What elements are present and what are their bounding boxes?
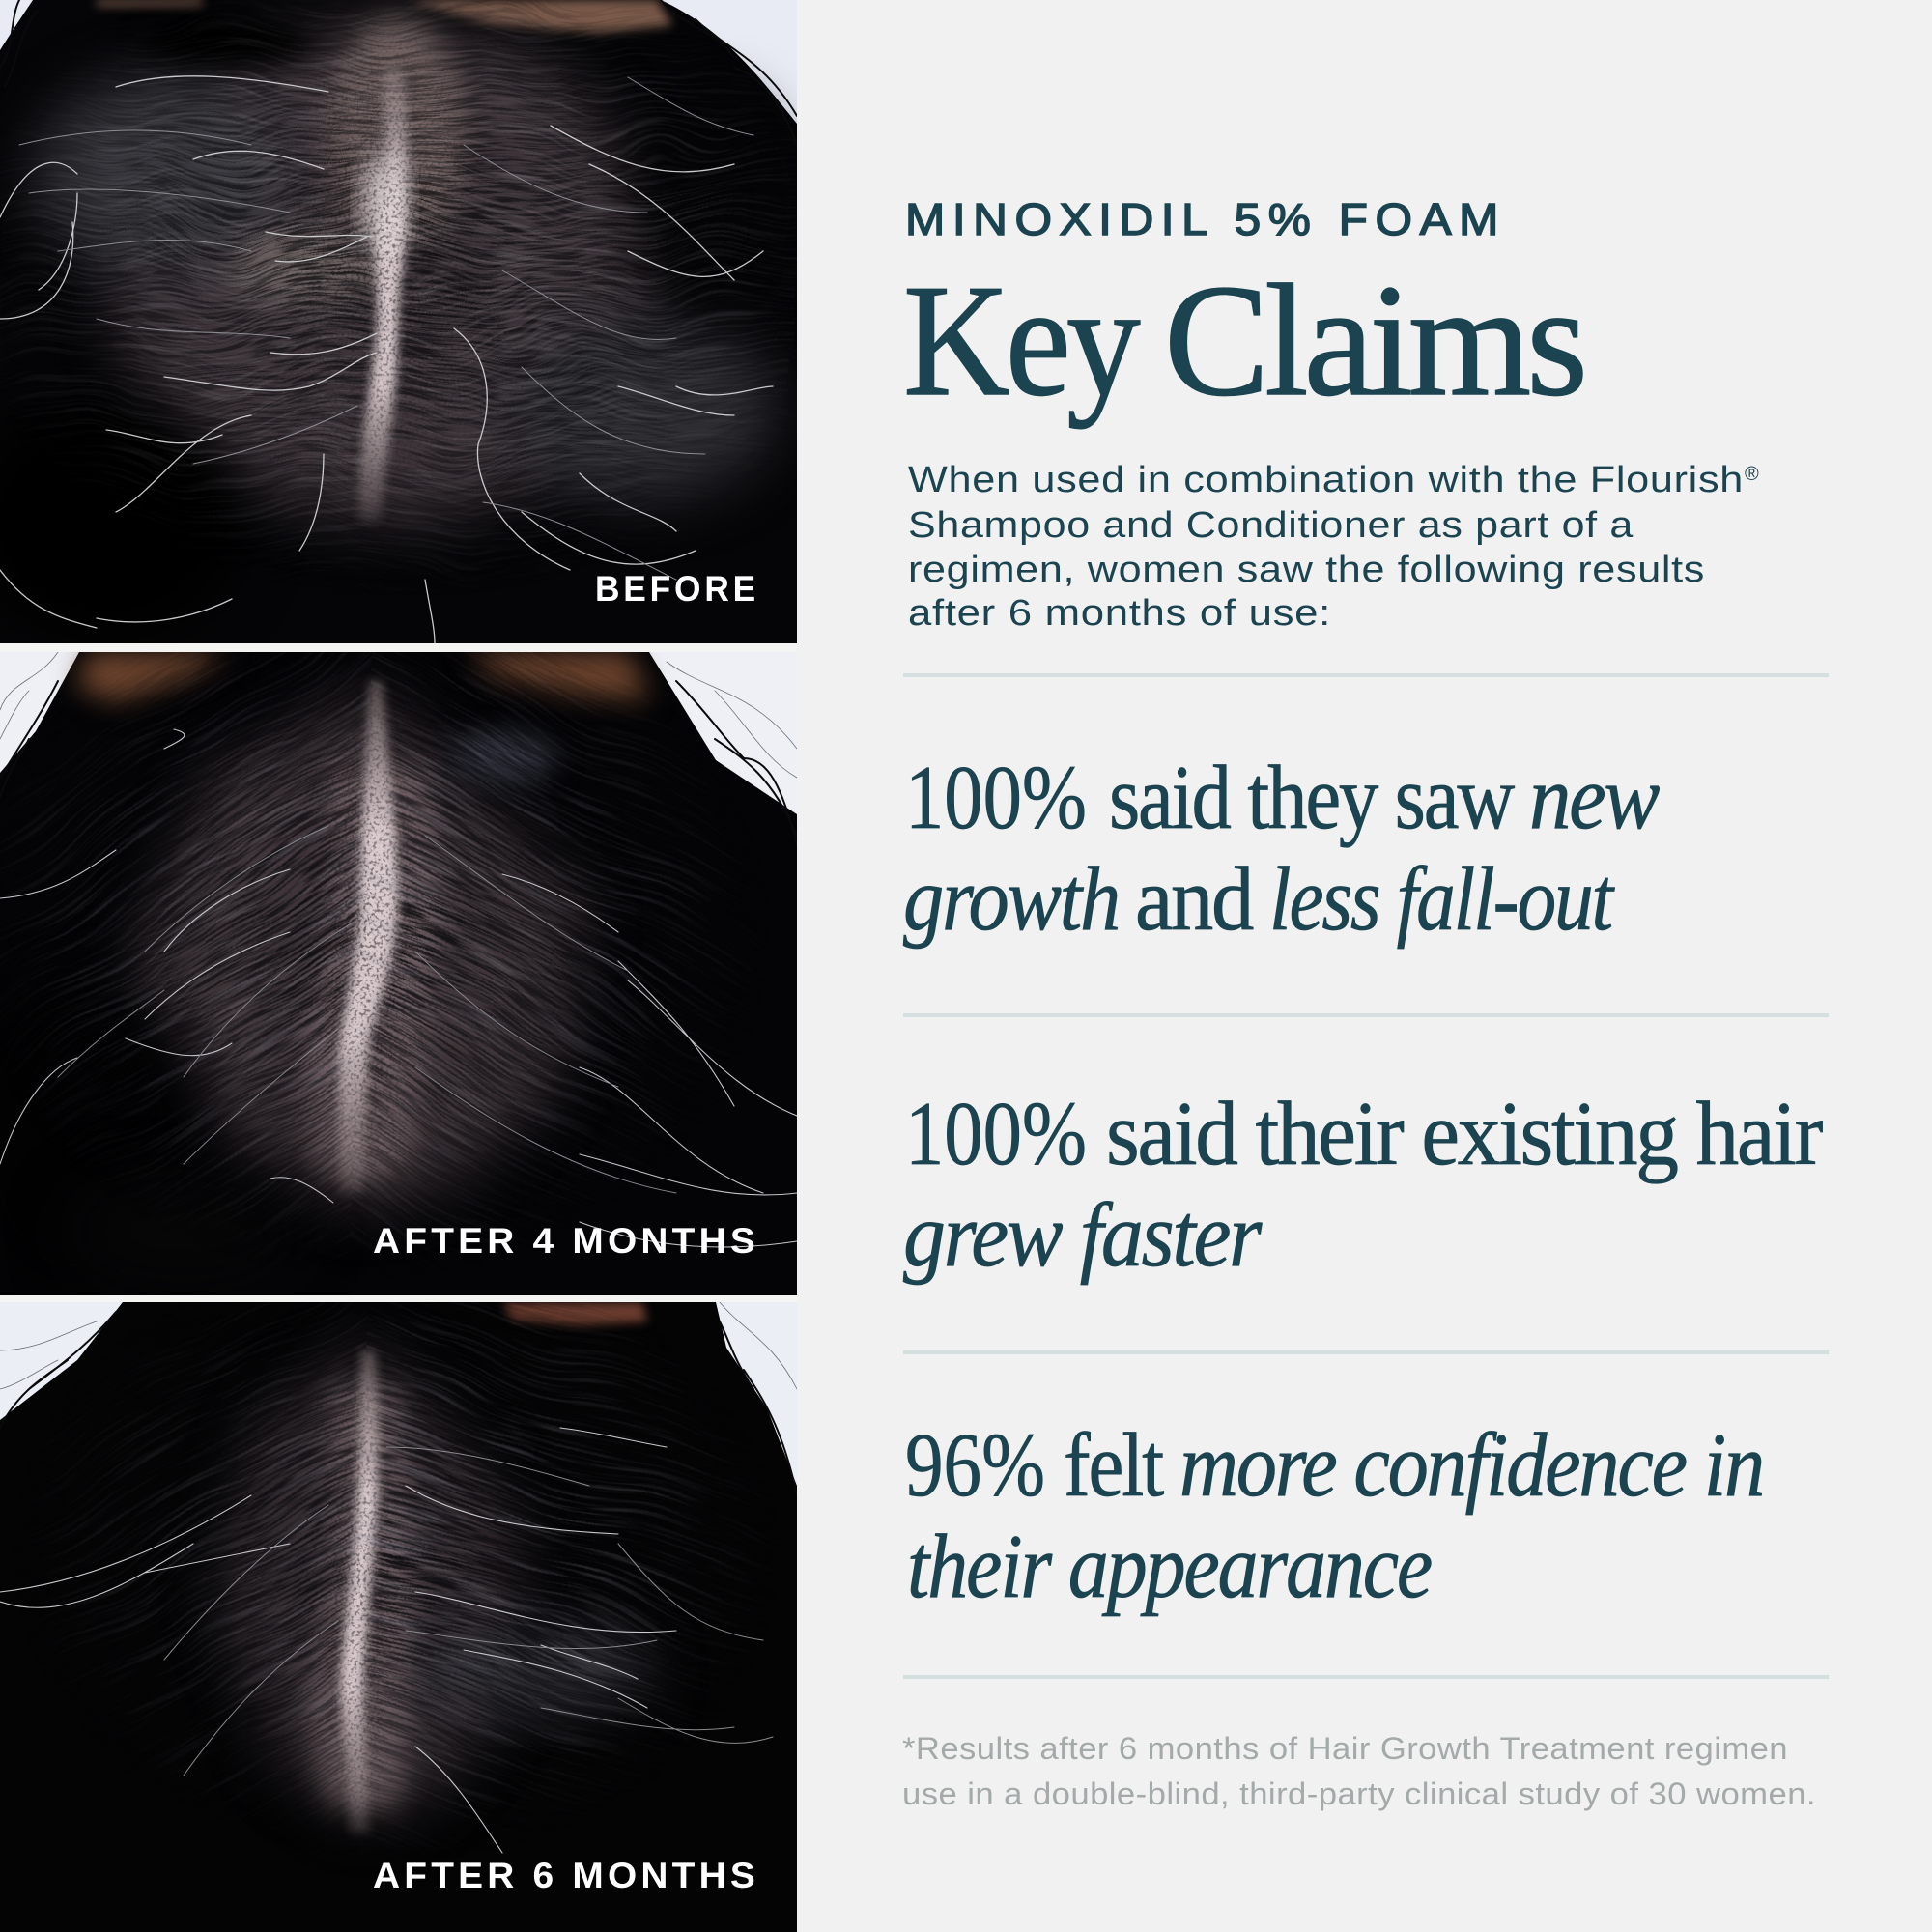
intro paragraph: ® [1745,464,1759,485]
title: key claims: Key [903,251,1141,429]
title: key claims [903,251,1583,429]
footnote: *Results after 6 months of Hair Growth Treatment regimen [902,1731,1788,1766]
claim: 100% new growth and less fall-out: new [1529,748,1661,848]
hair strands [0,652,797,1247]
claim: 100% existing hair grew faster: said their existing hair [1106,1084,1823,1184]
photo: after 6 months [0,1302,797,1932]
claim: 100% existing hair grew faster: grew faster [903,1185,1263,1286]
hair strands [0,0,797,643]
label: before: BEFORE [595,569,759,609]
claim: 100% new growth and less fall-out: said they saw [1109,748,1515,848]
claim: 100% new growth and less fall-out [903,748,1661,950]
claim: 100% new growth and less fall-out: less fall-out [1269,849,1615,950]
claim: 96% more confidence: their appearance [907,1517,1432,1617]
claim: 96% more confidence: felt [1064,1415,1164,1516]
hair strands [0,1302,797,1853]
intro paragraph: after 6 months of use: [908,593,1331,634]
label: after 6 months: AFTER 6 MONTHS [373,1856,759,1895]
claim: 100% new growth and less fall-out: growth [903,849,1119,950]
title: key claims: Claims [1164,251,1583,429]
intro paragraph [908,460,1759,634]
footnote [902,1731,1816,1811]
claim: 96% more confidence [905,1415,1763,1617]
gap strip between photos [0,0,797,1932]
divider lines [903,673,1829,1679]
intro paragraph: regimen, women saw the following results [908,550,1705,590]
photo: after 4 months [0,652,797,1295]
claim: 100% new growth and less fall-out: and [1135,849,1253,950]
claim: 96% more confidence: more confidence in [1179,1415,1763,1516]
claim: 100% existing hair grew faster: 100% [905,1084,1087,1184]
label: after 4 months: AFTER 4 MONTHS [373,1221,759,1261]
eyebrow: minoxidil 5% foam: MINOXIDIL 5% FOAM [905,194,1506,244]
intro paragraph: When used in combination with the Flourish [908,460,1744,500]
claim: 96% more confidence: 96% [905,1415,1045,1516]
intro paragraph: Shampoo and Conditioner as part of a [908,505,1634,546]
claim: 100% new growth and less fall-out: 100% [905,748,1087,848]
claim: 100% existing hair grew faster [903,1084,1823,1286]
photo: before [0,0,797,643]
footnote: use in a double-blind, third-party clinical study of 30 women. [902,1776,1816,1811]
